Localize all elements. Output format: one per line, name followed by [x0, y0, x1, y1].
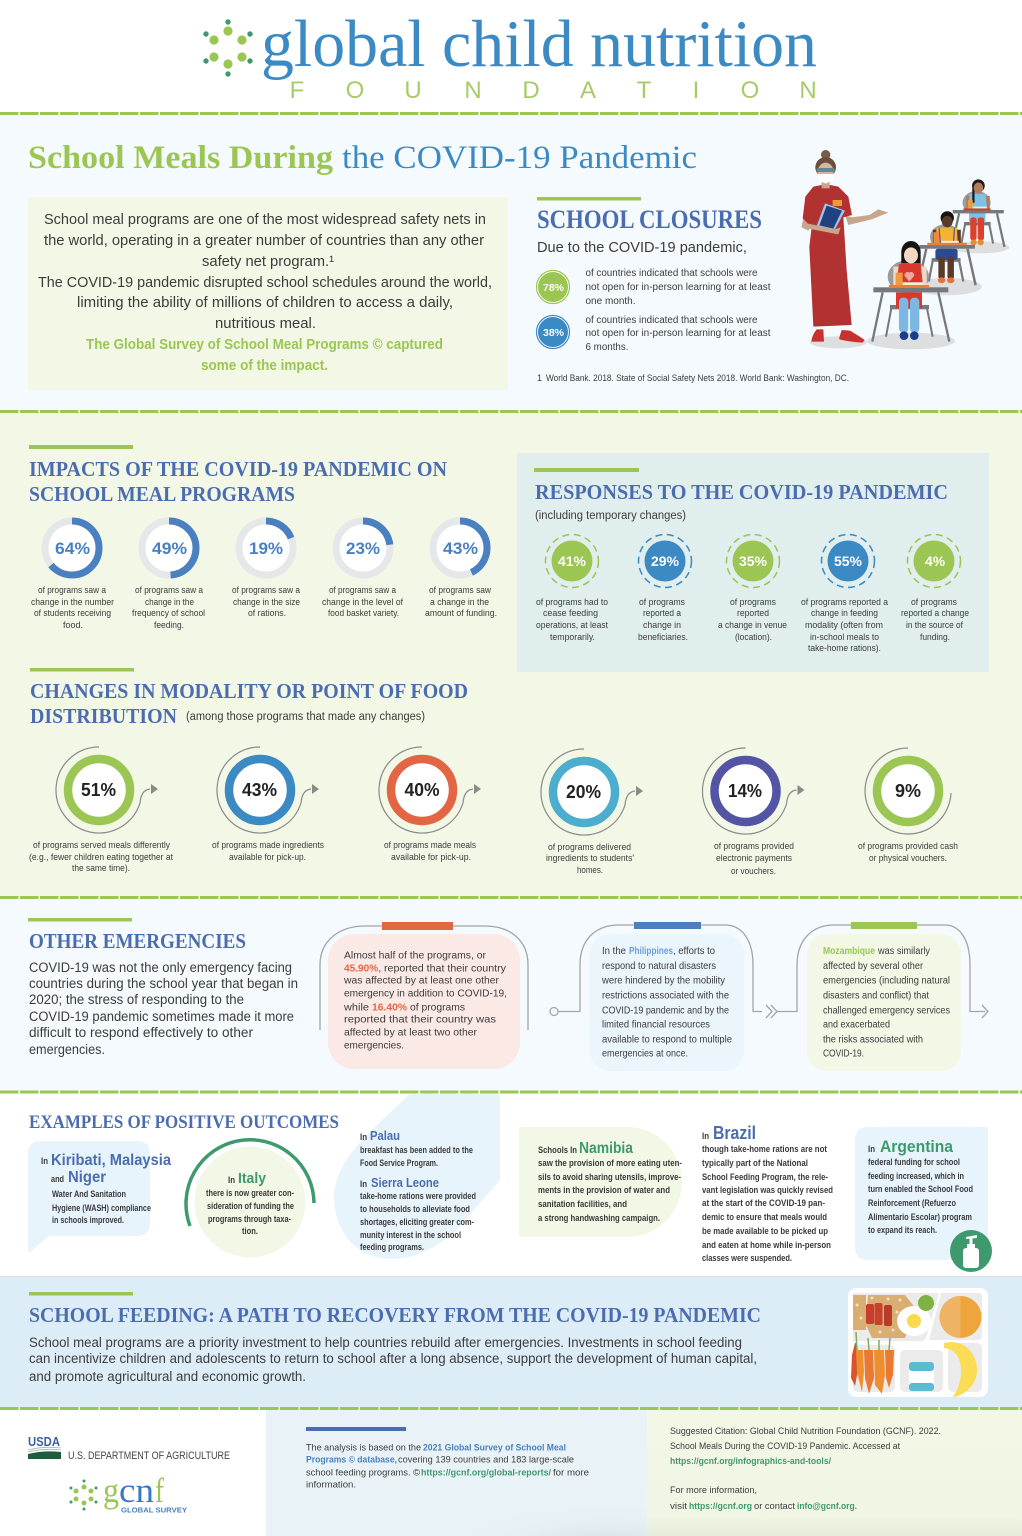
stat: 43 percent donut: 43%	[443, 539, 478, 558]
text block: analysis source: school feeding programs. ©	[306, 1468, 420, 1478]
main title: the COVID-19 Pandemic	[342, 140, 697, 176]
teacher	[801, 150, 888, 343]
stat: 29 percent: of programs	[639, 597, 685, 607]
card: almost half of programs: while	[343, 1002, 369, 1014]
stat: 55 percent: in-school meals to	[810, 632, 879, 642]
stat: 35 percent: (location).	[735, 632, 772, 642]
panel: responses	[517, 453, 989, 672]
stat: 9 percent ring	[858, 748, 958, 863]
card: Mozambique: disasters and conflict) that	[823, 990, 929, 1002]
logo subline: foundation: O	[346, 77, 364, 104]
callout: Argentina: Reinforcement (Refuerzo	[868, 1198, 956, 1208]
text block: Brazil: In	[702, 1131, 709, 1141]
text block: citation: School Meals During the COVID-19 Pandemic. Accessed at	[670, 1441, 900, 1451]
stat: 40 percent ring: available for pick-up.	[391, 852, 471, 862]
stat: 19 percent donut: change in the size	[233, 597, 300, 607]
callout: Italy: tion.	[242, 1226, 258, 1236]
text block: introduction: nutritious meal.	[215, 315, 316, 332]
card: almost half of programs: reported that their country	[384, 964, 506, 974]
background shape behind Palau and Sierra Leone	[334, 1094, 500, 1259]
panel: impacts, responses and changes section	[0, 412, 1022, 898]
text block: Brazil: typically part of the National	[702, 1158, 808, 1168]
card: Philippines: respond to natural disasters	[602, 961, 716, 972]
callout: Namibia: saw the provision of more eating uten-	[538, 1158, 682, 1168]
card: almost half of programs: emergency in addition to COVID-19,	[344, 988, 507, 1000]
logo: gcnf global survey: cn	[119, 1471, 154, 1510]
callout: Kiribati, Malaysia and Niger	[28, 1141, 171, 1253]
stat: 38 percent: 6 months.	[586, 342, 628, 353]
logo subline: foundation	[290, 77, 817, 104]
stat: 41 percent	[536, 534, 608, 642]
text block: citation	[670, 1426, 941, 1466]
stat: 38 percent	[536, 315, 771, 353]
callout: Kiribati, Malaysia and Niger: In	[41, 1156, 48, 1166]
stat: 55 percent: change in feeding	[811, 608, 878, 618]
card: Philippines: COVID-19 pandemic and by the	[602, 1006, 729, 1016]
text block: emergencies body: countries during the school year that began in	[29, 976, 298, 991]
text block: introduction	[28, 197, 508, 390]
callout: Kiribati, Malaysia and Niger: Niger	[68, 1169, 106, 1186]
stat: 20 percent ring: ingredients to students'	[546, 853, 634, 863]
callout: Argentina: feeding increased, which in	[868, 1171, 964, 1181]
stat: 64 percent donut: of students receiving	[34, 608, 111, 618]
stat: 78 percent: of countries indicated that schools were	[586, 268, 758, 279]
student: back row	[952, 179, 1004, 247]
text block: Palau: In	[360, 1132, 367, 1142]
text block: analysis source	[306, 1442, 589, 1490]
card: almost half of programs: Almost half of the programs, or	[344, 950, 487, 962]
stat: 4 percent: 4%	[925, 553, 946, 569]
text block: citation: Suggested Citation: Global Child Nutrition Foundation (GCNF). 2022.	[670, 1426, 941, 1436]
stat: 49 percent donut: change in the	[145, 597, 194, 607]
text block: Brazil	[702, 1123, 833, 1263]
text block: analysis source: Programs © database,	[306, 1454, 397, 1464]
callout: Namibia: sils to avoid sharing utensils, improve-	[538, 1172, 681, 1182]
callout: Namibia: sanitation facilities, and	[538, 1199, 627, 1209]
footnote: 1	[537, 373, 542, 383]
stat: 40 percent ring	[379, 747, 481, 862]
stat: 43 percent donut: a change in the	[430, 597, 489, 607]
panel: school feeding path to recovery	[0, 1277, 1022, 1409]
card: Philippines: were hindered by the mobility	[601, 976, 725, 986]
stat: 19 percent donut: of programs saw a	[232, 585, 300, 595]
stat: 14 percent ring: electronic payments	[716, 853, 792, 863]
heading: responses: RESPONSES TO THE COVID-19 PANDEMIC	[535, 480, 948, 504]
stat: 49 percent donut	[132, 518, 205, 630]
logo subline: foundation: I	[693, 77, 699, 104]
text block: contact: https://gcnf.org	[689, 1501, 752, 1511]
stat: 78 percent: 78%	[543, 282, 565, 294]
logo: USDA: USDA	[28, 1434, 61, 1449]
text block: analysis source: https://gcnf.org/global-reports/	[421, 1468, 551, 1478]
panel: other emergencies section	[0, 898, 1022, 1092]
text block: emergencies body	[29, 960, 298, 1057]
stat: 43 percent donut	[425, 518, 497, 618]
panel: header	[0, 0, 1022, 113]
connector lines between cards	[320, 925, 988, 1030]
text block: introduction: The Global Survey of School Meal Programs © captured	[86, 336, 443, 353]
callout: Argentina: to expand its reach.	[868, 1225, 937, 1235]
text block: introduction: The COVID-19 pandemic disrupted school schedules around the world,	[38, 274, 492, 291]
main title: School Meals During	[28, 140, 334, 176]
heading: impacts: IMPACTS OF THE COVID-19 PANDEMIC ON	[29, 457, 447, 481]
stat: 41 percent: operations, at least	[536, 620, 608, 630]
card: Mozambique: challenged emergency services	[823, 1006, 950, 1016]
callout: Namibia: Namibia	[579, 1140, 633, 1157]
stat: 55 percent: of programs reported a	[801, 597, 888, 607]
heading: school feeding: SCHOOL FEEDING: A PATH TO RECOVERY FROM THE COVID-19 PANDEMIC	[29, 1303, 761, 1327]
text block: Palau	[360, 1129, 473, 1168]
callout: Italy: programs through taxa-	[208, 1214, 291, 1224]
text block: recovery body: can incentivize children and adolescents to return to school after a long absence, support the development of human capital,	[29, 1351, 757, 1366]
text block: introduction: limiting the ability of millions of children to access a daily,	[77, 294, 453, 311]
callout: Namibia: Schools In	[538, 1145, 577, 1155]
stat: 29 percent: reported a	[643, 608, 681, 618]
stat: 29 percent: 29%	[651, 553, 680, 569]
stat: 41 percent: temporarily.	[550, 632, 595, 642]
stat: 55 percent	[801, 534, 888, 653]
stat: 43 percent ring: of programs made ingredients	[212, 840, 324, 850]
card: almost half of programs: affected by at least two other	[344, 1028, 478, 1038]
stat: 23 percent donut: 23%	[346, 539, 380, 558]
stat: 35 percent: a change in venue	[718, 620, 787, 630]
stat: 55 percent: modality (often from	[805, 620, 883, 630]
accent bar	[28, 918, 132, 922]
stat: 43 percent donut: amount of funding.	[425, 608, 497, 618]
stat: 23 percent donut	[322, 518, 403, 618]
callout: Argentina: In	[868, 1144, 875, 1154]
stat: 55 percent: take-home rations).	[808, 643, 881, 653]
stat: 20 percent ring: homes.	[577, 865, 603, 875]
logo subline: foundation: O	[741, 77, 759, 104]
stat: 4 percent	[901, 534, 969, 642]
text block: analysis source: for more	[553, 1468, 589, 1478]
callout: Argentina: Argentina	[880, 1137, 953, 1156]
card: Philippines: emergencies at once.	[602, 1048, 688, 1060]
callout: Kiribati, Malaysia and Niger: in schools improved.	[52, 1215, 124, 1225]
text block: Brazil: Brazil	[713, 1123, 756, 1143]
text block: contact	[670, 1485, 857, 1511]
stat: 4 percent: reported a change	[901, 608, 969, 618]
heading: impacts	[29, 457, 447, 506]
callout: Kiribati, Malaysia and Niger: Hygiene (WASH) compliance	[52, 1203, 151, 1213]
stat: 49 percent donut: feeding.	[154, 620, 184, 630]
stat: 29 percent: change in	[643, 620, 681, 630]
stat: 14 percent ring: or vouchers.	[731, 866, 776, 876]
text block: citation: https://gcnf.org/infographics-and-tools/	[670, 1456, 831, 1466]
text block: Palau: Food Service Program.	[360, 1158, 438, 1168]
stat: 20 percent ring: of programs delivered	[548, 842, 631, 852]
text: closures lead: Due to the COVID-19 pandemic,	[537, 239, 747, 256]
stat: 14 percent ring: of programs provided	[714, 841, 794, 851]
text block: Brazil: though take-home rations are not	[702, 1144, 827, 1154]
card: Philippines: limited financial resources	[602, 1020, 710, 1030]
text block: Sierra Leone: feeding programs.	[360, 1242, 424, 1252]
heading: changes in modality: (among those programs that made any changes)	[186, 711, 425, 723]
logo subline: foundation: U	[404, 77, 422, 104]
card: Mozambique: COVID-19.	[823, 1048, 864, 1060]
callout: Kiribati, Malaysia and Niger: and	[51, 1174, 64, 1184]
stat: 19 percent donut	[232, 518, 300, 618]
text block: analysis source: 2021 Global Survey of School Meal	[423, 1442, 566, 1452]
callout: Italy: there is now greater con-	[206, 1188, 294, 1198]
text block: emergencies body: difficult to respond effectively to other	[29, 1025, 253, 1040]
card: almost half of programs: 16.40%	[372, 1002, 407, 1014]
stat: 41 percent: of programs had to	[536, 597, 608, 607]
text block: Sierra Leone: to households to alleviate food	[360, 1204, 470, 1214]
stat: 29 percent	[638, 534, 692, 642]
stat: 23 percent donut: of programs saw a	[329, 585, 396, 595]
card: Philippines: restrictions associated with the	[602, 990, 729, 1002]
card: Philippines	[590, 922, 744, 1071]
stat: 49 percent donut: frequency of school	[132, 608, 205, 618]
callout: Kiribati, Malaysia and Niger: Water And Sanitation	[52, 1189, 126, 1199]
stat: 41 percent: 41%	[558, 553, 587, 569]
text block: Sierra Leone: shortages, eliciting greater com-	[360, 1217, 474, 1227]
illustration: teacher and students	[801, 150, 1009, 349]
text block: Sierra Leone: Sierra Leone	[371, 1176, 439, 1190]
logo: gcnf global survey	[70, 1471, 187, 1514]
card: almost half of programs: reported that their country was	[344, 1014, 496, 1026]
text block: recovery body	[29, 1335, 757, 1384]
stat: 9 percent ring: or physical vouchers.	[869, 853, 947, 863]
stat: 51 percent ring	[29, 747, 173, 873]
text block: introduction: School meal programs are one of the most widespread safety nets in	[44, 211, 486, 228]
stat: 64 percent donut: of programs saw a	[38, 585, 106, 595]
callout: Argentina: federal funding for school	[868, 1157, 960, 1167]
card: almost half of programs: of programs	[410, 1002, 465, 1014]
stat: 14 percent ring	[703, 748, 804, 876]
text block: Brazil: be made available to be picked up	[702, 1226, 828, 1236]
text block: analysis source: covering 139 countries and 183 large-scale	[398, 1454, 574, 1464]
stat: 49 percent donut: 49%	[152, 539, 187, 558]
student: middle row	[918, 211, 976, 285]
accent bar	[537, 197, 641, 200]
stat: 64 percent donut: change in the number	[31, 597, 114, 607]
card: Mozambique: emergencies (including natural	[823, 976, 950, 986]
callout: Italy	[186, 1140, 314, 1258]
callout: Namibia: a strong handwashing campaign.	[538, 1213, 660, 1223]
stat: 35 percent: of programs	[730, 597, 776, 607]
accent bar	[29, 1292, 133, 1296]
stat: 78 percent: not open for in-person learning for at least	[586, 282, 771, 293]
text block: contact: or contact	[754, 1501, 796, 1511]
card: Mozambique: Mozambique	[823, 946, 875, 957]
callout: Namibia	[519, 1127, 682, 1237]
logo: gcnf global survey: GLOBAL SURVEY	[121, 1506, 187, 1514]
text block: recovery body: School meal programs are a priority investment to help countries rebuild after emergencies. Investments in school feeding	[29, 1335, 742, 1350]
stat: 38 percent: 38%	[543, 327, 565, 339]
text block: analysis source: The analysis is based on the	[306, 1442, 421, 1452]
stat: 4 percent: of programs	[911, 597, 957, 607]
stat: 38 percent: not open for in-person learning for at least	[586, 328, 771, 339]
stat: 64 percent donut: 64%	[55, 539, 90, 558]
callout: Argentina	[855, 1127, 988, 1260]
stat: 35 percent	[718, 534, 787, 642]
text block: emergencies body: COVID-19 was not the only emergency facing	[29, 960, 292, 975]
logo wordmark: global child nutrition	[261, 7, 817, 81]
card: Mozambique: was similarly	[877, 946, 930, 957]
logo: USDA	[28, 1434, 230, 1462]
card: almost half of programs	[328, 922, 520, 1069]
heading: changes in modality: CHANGES IN MODALITY OR POINT OF FOOD	[30, 679, 468, 703]
text block: Brazil: vant legislation was quickly revised	[702, 1185, 833, 1195]
text block: introduction: some of the impact.	[201, 357, 328, 374]
text block: Sierra Leone: In	[360, 1179, 367, 1189]
callout: Italy: In	[228, 1175, 235, 1185]
logo subline: foundation: D	[522, 77, 540, 104]
text block: Brazil: at the start of the COVID-19 pan-	[702, 1198, 825, 1208]
card: Philippines: In the	[602, 946, 626, 957]
logo subline: foundation: F	[290, 77, 304, 104]
text block: emergencies body: emergencies.	[29, 1042, 105, 1057]
heading: changes in modality	[30, 679, 468, 728]
stat: 51 percent ring: of programs served meals differently	[33, 840, 170, 850]
accent bar	[30, 668, 134, 672]
stat: 49 percent donut: of programs saw a	[135, 585, 203, 595]
card: almost half of programs: 45.90%,	[344, 964, 381, 974]
text block: Sierra Leone: munity interest in the school	[360, 1230, 461, 1240]
stat: 40 percent ring: 40%	[404, 780, 440, 800]
stat: 43 percent ring: 43%	[242, 780, 277, 800]
stat: 64 percent donut	[31, 518, 114, 630]
illustration: lunch tray	[848, 1288, 988, 1397]
card: almost half of programs: emergencies.	[344, 1040, 404, 1052]
card: Mozambique	[807, 922, 961, 1071]
card: Philippines: , efforts to	[673, 946, 715, 957]
logo: gcnf global survey: f	[155, 1471, 164, 1510]
stat: 40 percent ring: of programs made meals	[384, 840, 476, 850]
logo subline: foundation: T	[637, 77, 652, 104]
stat: 9 percent ring: of programs provided cash	[858, 841, 958, 851]
student: front row	[872, 241, 949, 342]
text block: introduction: safety net program.¹	[202, 253, 334, 270]
text block: Brazil: demic to ensure that meals would	[702, 1212, 827, 1222]
text block: Sierra Leone: take-home rations were provided	[360, 1191, 476, 1201]
footnote: World Bank. 2018. State of Social Safety Nets 2018. World Bank: Washington, DC.	[546, 373, 849, 383]
card: almost half of programs: was affected by at least one other	[343, 976, 500, 986]
panel: footer logos	[0, 1409, 266, 1536]
stat: 20 percent ring: 20%	[566, 782, 601, 802]
text block: contact: For more information,	[670, 1485, 757, 1495]
heading: school closures: SCHOOL CLOSURES	[537, 205, 762, 234]
text block: contact: visit	[670, 1501, 688, 1511]
panel: examples of positive outcomes	[0, 1092, 1022, 1278]
stat: 35 percent: reported	[737, 608, 769, 618]
text block: Brazil: and eaten at home while in-person	[702, 1240, 831, 1250]
stat: 78 percent: one month.	[586, 296, 636, 307]
text block: emergencies body: 2020; the stress of responding to the	[29, 992, 244, 1007]
text block: Sierra Leone	[360, 1176, 476, 1252]
stat: 51 percent ring: 51%	[81, 780, 116, 800]
stat: 38 percent: of countries indicated that schools were	[586, 315, 758, 326]
heading: changes in modality: DISTRIBUTION	[30, 704, 177, 728]
stat: 4 percent: funding.	[920, 632, 950, 642]
stat: 29 percent: beneficiaries.	[638, 632, 688, 642]
stat: 19 percent donut: of rations.	[248, 608, 286, 618]
text: responses subheading: (including temporary changes)	[535, 510, 686, 522]
logo subline: foundation: N	[799, 77, 817, 104]
stat: 14 percent ring: 14%	[728, 781, 762, 801]
text block: contact: info@gcnf.org.	[797, 1501, 857, 1511]
stat: 64 percent donut: food.	[63, 620, 83, 630]
text block: Palau: Palau	[370, 1129, 400, 1143]
text block: Brazil: School Feeding Program, the rele-	[702, 1172, 828, 1182]
stat: 35 percent: 35%	[739, 553, 768, 569]
logo: USDA: U.S. DEPARTMENT OF AGRICULTURE	[68, 1450, 230, 1462]
stat: 43 percent donut: of programs saw	[429, 585, 491, 595]
logo mark: dots	[203, 19, 253, 77]
panel: intro section	[0, 113, 1022, 412]
text block: Palau: breakfast has been added to the	[360, 1145, 473, 1155]
heading: impacts: SCHOOL MEAL PROGRAMS	[29, 482, 295, 506]
stat: 20 percent ring	[541, 749, 643, 875]
main title	[28, 140, 697, 176]
card: Mozambique: the risks associated with	[823, 1034, 923, 1046]
callout: Argentina: turn enabled the School Food	[868, 1184, 973, 1194]
icon: hand sanitizer	[950, 1230, 992, 1272]
logo: gcnf global survey: g	[103, 1471, 119, 1510]
stat: 43 percent ring	[212, 747, 324, 862]
logo subline: foundation: N	[464, 77, 482, 104]
stat: 19 percent donut: 19%	[249, 539, 283, 558]
stat: 43 percent ring: available for pick-up.	[229, 852, 306, 862]
stat: 4 percent: in the source of	[906, 620, 963, 630]
callout: Kiribati, Malaysia and Niger: Kiribati, Malaysia	[51, 1152, 171, 1169]
text block: recovery body: and promote agricultural and economic growth.	[29, 1369, 306, 1384]
heading: examples: EXAMPLES OF POSITIVE OUTCOMES	[29, 1112, 339, 1133]
stat: 23 percent donut: food basket variety.	[328, 608, 399, 618]
callout: Argentina: Alimentario Escolar) program	[868, 1212, 972, 1222]
stat: 9 percent ring: 9%	[895, 781, 921, 801]
stat: 51 percent ring: (e.g., fewer children eating together at	[29, 852, 173, 862]
stat: 23 percent donut: change in the level of	[322, 597, 403, 607]
text block: analysis source: information.	[306, 1480, 356, 1490]
callout: Italy: sideration of funding the	[207, 1201, 294, 1211]
stat: 55 percent: 55%	[834, 553, 863, 569]
callout: Namibia: ments in the provision of water and	[538, 1185, 670, 1195]
heading: other emergencies: OTHER EMERGENCIES	[29, 929, 246, 953]
stat: 78 percent	[536, 268, 771, 307]
card: Philippines: available to respond to multiple	[602, 1034, 732, 1046]
logo subline: foundation: A	[580, 77, 596, 104]
text block: introduction: the world, operating in a greater number of countries than any other	[44, 232, 484, 249]
card: Mozambique: and exacerbated	[823, 1020, 890, 1030]
card: Philippines: Philippines	[629, 946, 673, 957]
card: Mozambique: affected by several other	[823, 961, 924, 972]
panel: footer data source	[266, 1409, 647, 1536]
text block: emergencies body: COVID-19 pandemic sometimes made it more	[29, 1009, 294, 1024]
callout: Italy: Italy	[238, 1170, 267, 1187]
stat: 41 percent: cease feeding	[543, 608, 598, 618]
stat: 51 percent ring: the same time).	[72, 863, 130, 873]
text block: Brazil: classes were suspended.	[702, 1253, 792, 1263]
panel: footer citation	[647, 1409, 1022, 1536]
accent bar	[29, 445, 133, 449]
